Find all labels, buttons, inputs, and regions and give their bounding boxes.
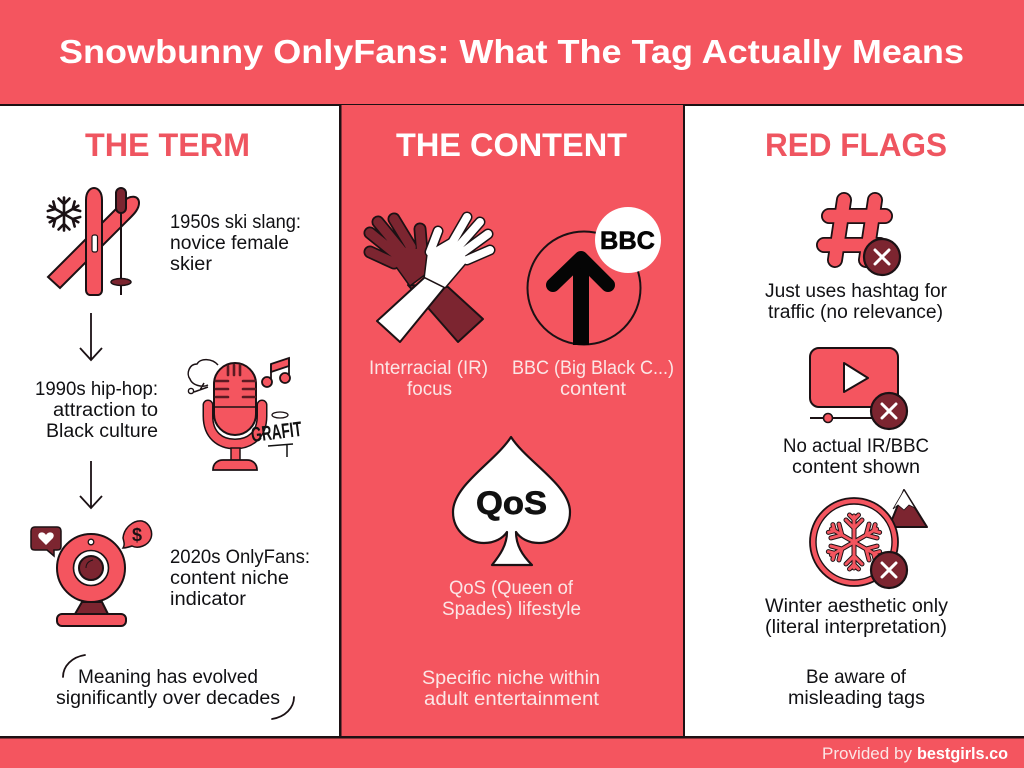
text: winter flag bbox=[765, 596, 949, 638]
text: 1950s ski slang: novice female bbox=[170, 233, 289, 254]
text: 2020s onlyfans bbox=[170, 547, 310, 610]
text: 1950s ski slang bbox=[170, 212, 301, 275]
text: 1950s ski slang: 1950s ski slang: bbox=[170, 212, 301, 233]
callout: specific niche: adult entertainment bbox=[424, 689, 600, 710]
callout: specific niche bbox=[422, 668, 600, 710]
callout: be aware bbox=[788, 667, 925, 709]
icon: microphone with graffiti bbox=[188, 358, 303, 470]
icon: snowflake, mountain and x badge bbox=[810, 490, 927, 588]
text: hashtag flag bbox=[765, 281, 948, 323]
text: 1990s hip-hop: Black culture bbox=[46, 421, 158, 442]
text: qos lifestyle: QoS (Queen of bbox=[449, 578, 574, 599]
panel: red flags bbox=[685, 106, 1024, 736]
text: 1990s hip-hop: 1990s hip-hop: bbox=[35, 379, 158, 400]
text: bbc content: BBC (Big Black C...) bbox=[512, 358, 674, 379]
text: qos lifestyle bbox=[442, 578, 581, 620]
text: winter flag: (literal interpretation) bbox=[765, 617, 947, 638]
icon: crossed hands bbox=[370, 217, 490, 342]
callout: meaning has evolved: Meaning has evolved bbox=[78, 667, 258, 688]
text: qos lifestyle: Spades) lifestyle bbox=[442, 599, 581, 620]
callout: meaning has evolved bbox=[56, 655, 294, 719]
text: hashtag flag: traffic (no relevance) bbox=[768, 302, 943, 323]
text: interracial focus bbox=[369, 358, 488, 400]
icon: hashtag with x badge bbox=[824, 200, 900, 275]
text: winter flag: Winter aesthetic only bbox=[765, 596, 949, 617]
icon: upward arrow with BBC badge: BBC bbox=[600, 227, 655, 255]
panel: the content bbox=[339, 105, 686, 737]
icon: upward arrow with BBC badge bbox=[528, 207, 661, 345]
arrow: hip-hop to onlyfans bbox=[80, 461, 102, 508]
text: video flag: No actual IR/BBC bbox=[783, 436, 929, 457]
panel: footer bbox=[0, 736, 1024, 768]
panel: header banner bbox=[0, 0, 1024, 106]
text: 1990s hip-hop: attraction to bbox=[53, 400, 158, 421]
text: 1990s hip-hop bbox=[35, 379, 158, 442]
text: 1950s ski slang: skier bbox=[170, 254, 213, 275]
text: video flag: content shown bbox=[792, 457, 920, 478]
arrow: ski to hip-hop bbox=[80, 313, 102, 360]
text: provided by: Provided by bbox=[822, 744, 912, 763]
icon: video player with x badge bbox=[810, 348, 907, 429]
callout: specific niche: Specific niche within bbox=[422, 668, 600, 689]
heading: the term: THE TERM bbox=[85, 127, 250, 163]
callout: be aware: Be aware of bbox=[806, 667, 907, 688]
text: hashtag flag: Just uses hashtag for bbox=[765, 281, 948, 302]
callout: be aware: misleading tags bbox=[788, 688, 925, 709]
icon: webcam with bubbles bbox=[31, 521, 152, 626]
text: 2020s onlyfans: indicator bbox=[170, 589, 247, 610]
heading: red flags: RED FLAGS bbox=[765, 127, 947, 163]
text: interracial focus: Interracial (IR) bbox=[369, 358, 488, 379]
text: video flag bbox=[783, 436, 929, 478]
icon: microphone with graffiti: GRAFIT bbox=[250, 418, 303, 447]
text: bbc content: content bbox=[560, 379, 627, 400]
text: bestgirls.co: bestgirls.co bbox=[917, 744, 1008, 763]
text: interracial focus: focus bbox=[407, 379, 452, 400]
panel: the term bbox=[0, 106, 339, 736]
text: bbc content bbox=[512, 358, 674, 400]
icon: webcam with bubbles: $ bbox=[132, 525, 142, 545]
icon: skis and snowflake bbox=[47, 188, 139, 295]
icon: spade with QoS bbox=[453, 437, 570, 565]
callout: meaning has evolved: significantly over decades bbox=[56, 688, 280, 709]
text: 2020s onlyfans: 2020s OnlyFans: bbox=[170, 547, 310, 568]
title: Snowbunny OnlyFans: What The Tag Actually Means bbox=[59, 33, 964, 70]
heading: the content: THE CONTENT bbox=[396, 127, 627, 163]
text: 2020s onlyfans: content niche bbox=[170, 568, 289, 589]
icon: spade with QoS: QoS bbox=[476, 485, 547, 521]
